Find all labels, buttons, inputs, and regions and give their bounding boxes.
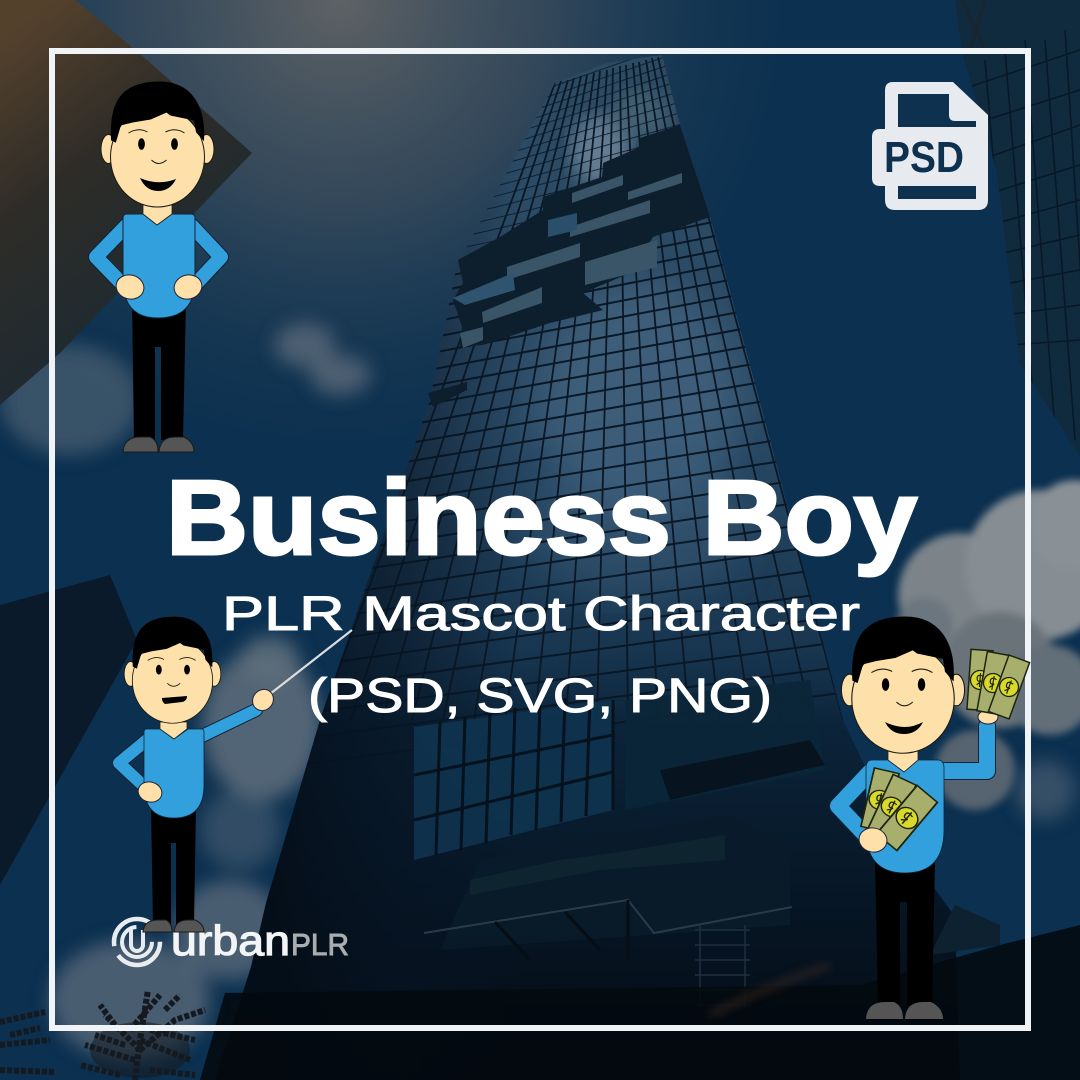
torso [123, 214, 195, 318]
pointer stick [261, 630, 352, 701]
torso [144, 729, 204, 818]
arms [119, 710, 256, 790]
PSD file icon: PSD [884, 133, 964, 182]
character: standing with hands on hips [96, 82, 221, 452]
hands [113, 272, 147, 302]
PSD file icon [872, 82, 988, 210]
head [841, 617, 965, 753]
shoes [143, 920, 204, 932]
hands [857, 826, 889, 854]
building: top right [955, 0, 1080, 456]
neck [143, 205, 172, 225]
foliage strip [470, 835, 725, 895]
neck [160, 722, 187, 739]
logo: urbanPLR: urban [171, 917, 290, 964]
smile [885, 722, 923, 734]
arms [96, 226, 221, 288]
dark staggered blocks [453, 125, 710, 347]
orange light streak [710, 965, 830, 1015]
title: Business Boy [166, 459, 917, 577]
character: pointing with stick [119, 617, 352, 932]
tree silhouettes [0, 990, 205, 1080]
head [124, 617, 221, 723]
building: lower left [0, 575, 137, 885]
flat mouth [162, 696, 187, 704]
tower windows and reflections [243, 56, 843, 992]
legs [132, 300, 186, 440]
character: holding money [838, 617, 1030, 1019]
clouds [0, 323, 1075, 1060]
head [101, 82, 214, 207]
main tower [215, 55, 960, 1080]
hands [136, 779, 164, 805]
base building and truss [424, 900, 792, 933]
money raised [967, 649, 1030, 719]
legs [151, 805, 196, 925]
crane at top right [962, 0, 985, 50]
arms [838, 726, 987, 843]
shoes [866, 1002, 943, 1019]
legs [875, 860, 935, 1005]
subtitle line 1: PLR Mascot Character [222, 588, 860, 641]
torso [866, 760, 944, 873]
bright cloud on the right [897, 480, 1080, 810]
light bars [453, 173, 682, 348]
smile [140, 178, 176, 191]
building: top left [0, 0, 252, 405]
subtitle line 2: (PSD, SVG, PNG) [308, 670, 772, 723]
shoes [123, 437, 194, 452]
neck [888, 750, 918, 772]
lower window mullions [625, 680, 814, 722]
lower window panel [414, 700, 613, 860]
logo: urbanPLR: PLR [291, 927, 349, 962]
money on chest [861, 768, 937, 851]
logo: urbanPLR [114, 917, 349, 965]
